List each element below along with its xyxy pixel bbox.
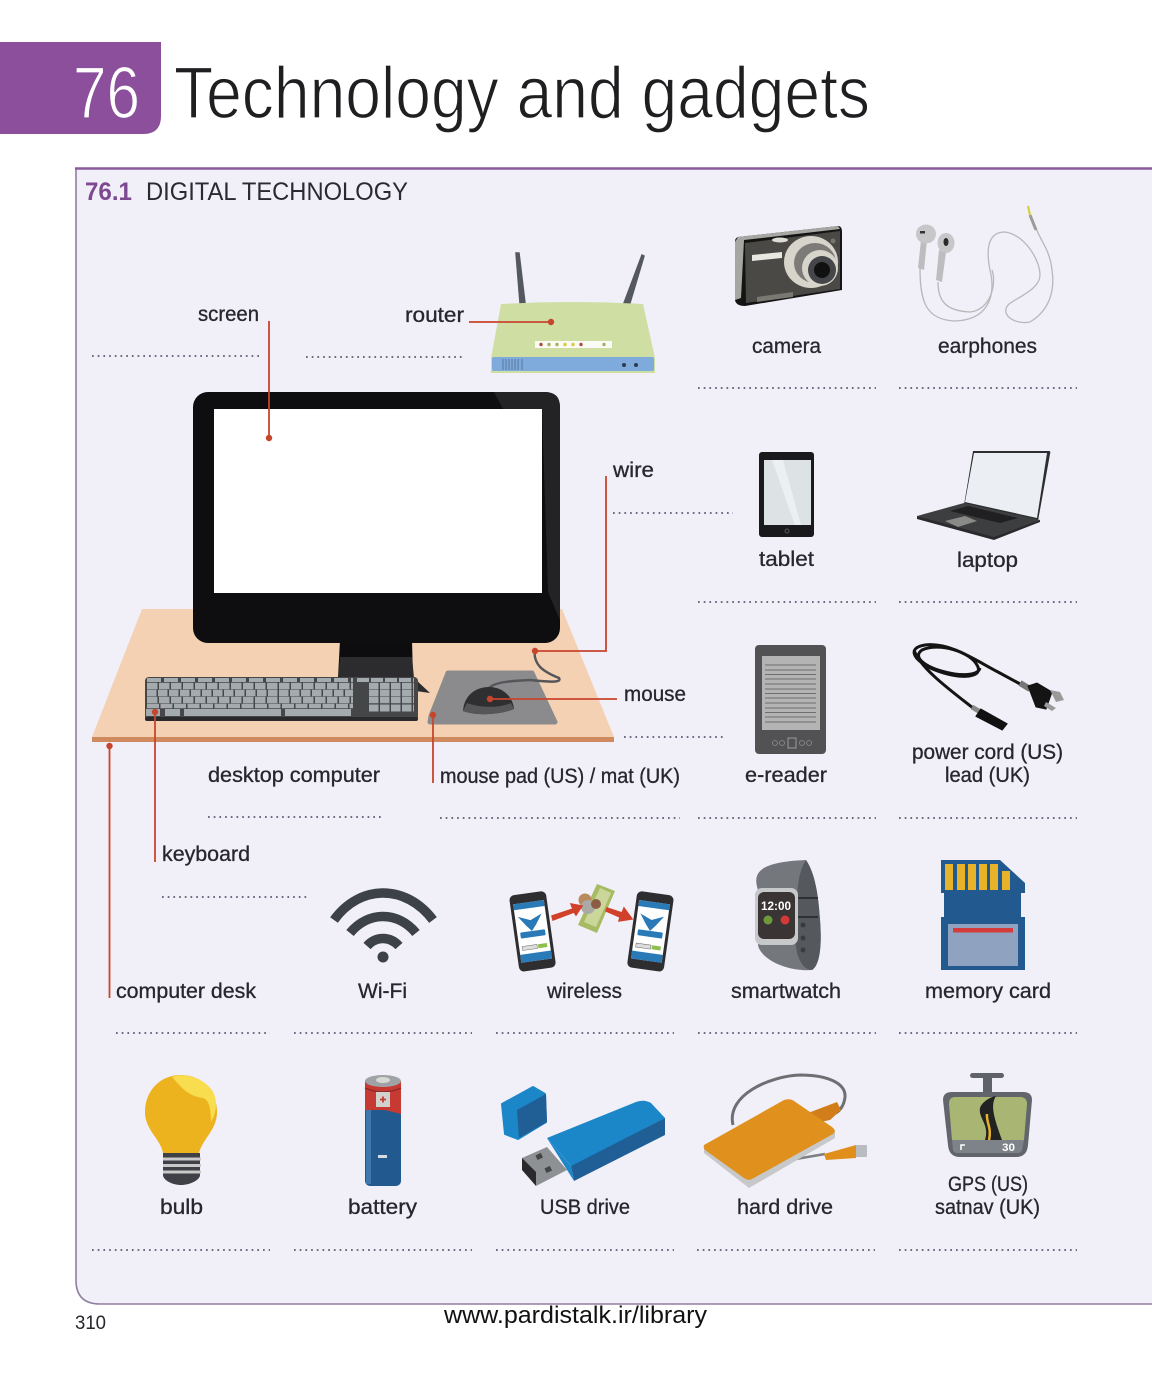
phone left [509, 891, 556, 972]
labels: smartwatch [731, 980, 841, 1003]
router [491, 253, 655, 373]
section heading: DIGITAL TECHNOLOGY [146, 178, 408, 206]
mouse pad [430, 673, 555, 722]
labels: mouse [624, 683, 686, 706]
labels: mouse pad (US) / mat (UK) [440, 765, 680, 788]
labels: satnav (UK) [935, 1196, 1040, 1219]
labels: router [405, 304, 464, 327]
labels: screen [198, 303, 259, 326]
laptop [917, 451, 1050, 540]
labels: wireless [546, 980, 622, 1003]
arrows [552, 904, 582, 920]
section heading: 76.1 [85, 178, 132, 206]
smartwatch [755, 860, 821, 970]
GPS [943, 1073, 1032, 1157]
power cord [914, 645, 1064, 729]
page number: 310 [75, 1313, 106, 1334]
answer dotted lines [92, 356, 1077, 1250]
header tab with chapter number: 76 [73, 53, 140, 134]
camera [735, 226, 842, 306]
labels: power cord (US) [912, 741, 1063, 764]
money [578, 884, 615, 933]
labels: Wi-Fi [358, 980, 407, 1003]
labels: GPS (US) [948, 1173, 1028, 1196]
earphones [916, 206, 1053, 323]
labels: keyboard [162, 843, 250, 866]
labels: camera [752, 335, 821, 358]
memory card [941, 860, 1025, 970]
labels: tablet [759, 548, 814, 571]
labels: USB drive [540, 1196, 630, 1219]
mouse with cable [463, 648, 559, 714]
bulb [145, 1075, 217, 1185]
GPS: 30 [1002, 1142, 1015, 1154]
desk [92, 609, 614, 742]
USB drive [502, 1087, 665, 1186]
website credit: www.pardistalk.ir/library [443, 1302, 707, 1329]
labels: earphones [938, 335, 1037, 358]
battery [365, 1075, 401, 1186]
hard drive [704, 1075, 867, 1188]
labels: battery [348, 1196, 418, 1219]
title: Technology and gadgets [174, 53, 870, 134]
Wi-Fi icon [334, 893, 433, 962]
labels: e-reader [745, 764, 827, 787]
labels: desktop computer [208, 764, 380, 787]
smartwatch: 12:00 [761, 901, 791, 913]
labels [116, 303, 1063, 1219]
tablet [759, 452, 814, 537]
labels: memory card [925, 980, 1051, 1003]
labels: wire [612, 459, 654, 482]
labels: bulb [160, 1196, 203, 1219]
panel: digital technology [75, 168, 1152, 1304]
labels: lead (UK) [945, 764, 1030, 787]
e-reader [755, 645, 826, 754]
keyboard [145, 677, 418, 721]
wireless payment [509, 884, 674, 972]
phone right [627, 891, 674, 972]
labels: laptop [957, 549, 1018, 572]
labels: computer desk [116, 980, 257, 1003]
labels: hard drive [737, 1196, 833, 1219]
pointer lines [106, 319, 617, 998]
desktop computer monitor [193, 392, 560, 693]
header tab with chapter number [0, 42, 161, 134]
